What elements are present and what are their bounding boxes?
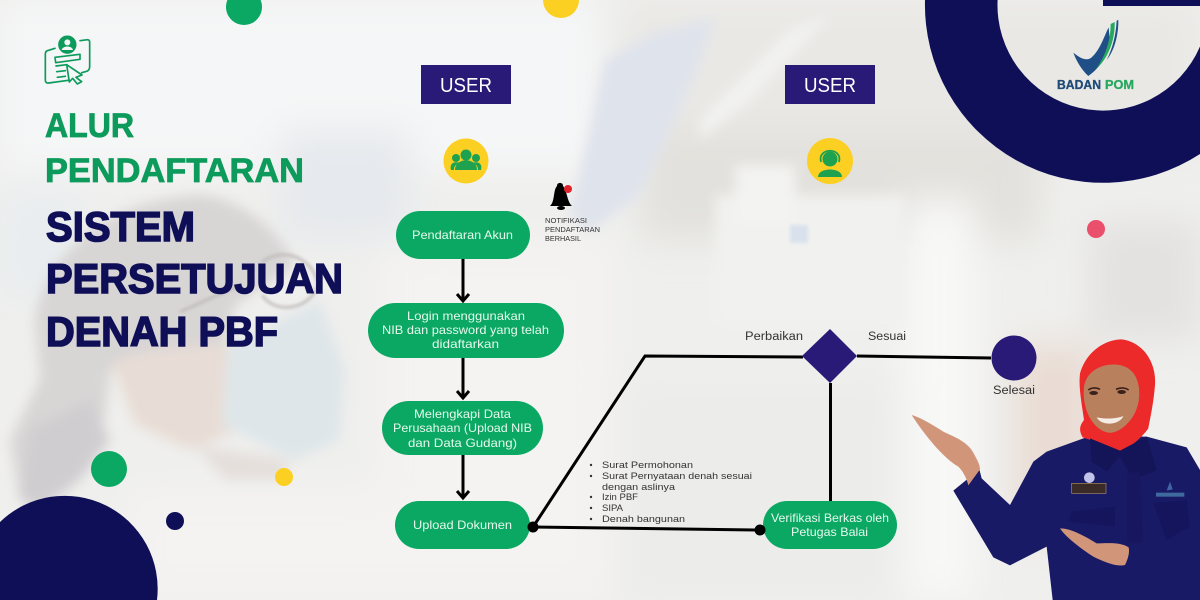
title: Alur Pendaftaran: ALUR <box>45 107 134 145</box>
step: Login <box>368 303 564 358</box>
step: Verifikasi Berkas: Petugas Balai <box>791 525 868 539</box>
label: Selesai: Selesai <box>993 385 1035 397</box>
icon: customer service agent <box>807 138 853 184</box>
notification caption <box>545 216 600 243</box>
document list: SIPA <box>602 503 624 514</box>
connector lines <box>533 356 991 530</box>
title: Sistem Persetujuan Denah PBF <box>46 203 343 355</box>
connector dot: end <box>754 524 766 536</box>
notification caption: PENDAFTARAN <box>545 225 600 234</box>
step: Melengkapi Data: Perusahaan (Upload NIB <box>393 421 532 435</box>
title: Alur Pendaftaran <box>45 107 304 190</box>
document list: dengan aslinya <box>602 482 676 493</box>
end node <box>992 336 1036 380</box>
title: Alur Pendaftaran: PENDAFTARAN <box>45 152 304 190</box>
arrow: step 1 to 2 <box>457 259 469 301</box>
document list: Surat Pernyataan denah sesuai <box>602 471 752 482</box>
arrow: step 2 to 3 <box>457 358 469 398</box>
icon: notification bell <box>550 183 572 210</box>
step: Login: Login menggunakan <box>407 309 525 323</box>
notification caption: NOTIFIKASI <box>545 216 587 225</box>
step: Pendaftaran Akun: Pendaftaran Akun <box>412 228 513 242</box>
corner ring top right <box>925 0 1200 183</box>
lane header: user: USER <box>440 75 492 97</box>
title: Sistem Persetujuan Denah PBF: PERSETUJUAN <box>46 255 343 302</box>
document list: Izin PBF <box>602 492 638 503</box>
lane header: user (petugas): USER <box>804 75 856 97</box>
logo: Badan POM: BADAN <box>1057 77 1101 92</box>
title: Sistem Persetujuan Denah PBF: SISTEM <box>46 203 195 250</box>
step: Verifikasi Berkas <box>763 501 897 549</box>
step: Upload Dokumen <box>395 501 530 549</box>
label: Perbaikan: Perbaikan <box>745 331 803 343</box>
corner circle bottom left <box>0 496 158 600</box>
step: Melengkapi Data <box>382 401 543 455</box>
logo: Badan POM: POM <box>1105 77 1134 92</box>
icon: user group <box>444 138 488 184</box>
title: Sistem Persetujuan Denah PBF: DENAH PBF <box>46 308 278 355</box>
notification caption: BERHASIL <box>545 234 581 243</box>
connector dot: start <box>528 522 538 532</box>
step: Login: didaftarkan <box>432 337 499 351</box>
step: Pendaftaran Akun <box>396 211 530 259</box>
lane header: user <box>421 65 511 104</box>
logo: Badan POM <box>1057 20 1134 92</box>
step: Upload Dokumen: Upload Dokumen <box>413 518 512 532</box>
presenter in red hijab and navy uniform <box>912 339 1200 600</box>
arrow: step 3 to 4 <box>457 455 469 498</box>
document list: Surat Permohonan <box>602 460 693 471</box>
decorative dots <box>91 0 1105 530</box>
step: Melengkapi Data: Melengkapi Data <box>414 407 511 421</box>
lane header: user (petugas) <box>785 65 875 104</box>
document list <box>590 460 752 525</box>
step: Verifikasi Berkas: Verifikasi Berkas oleh <box>771 511 889 525</box>
decision diamond <box>802 329 857 383</box>
icon: registration form with cursor <box>45 36 90 84</box>
label: Sesuai: Sesuai <box>868 331 906 343</box>
step: Login: NIB dan password yang telah <box>382 323 549 337</box>
step: Melengkapi Data: dan Data Gudang) <box>408 436 517 450</box>
document list: Denah bangunan <box>602 514 685 525</box>
